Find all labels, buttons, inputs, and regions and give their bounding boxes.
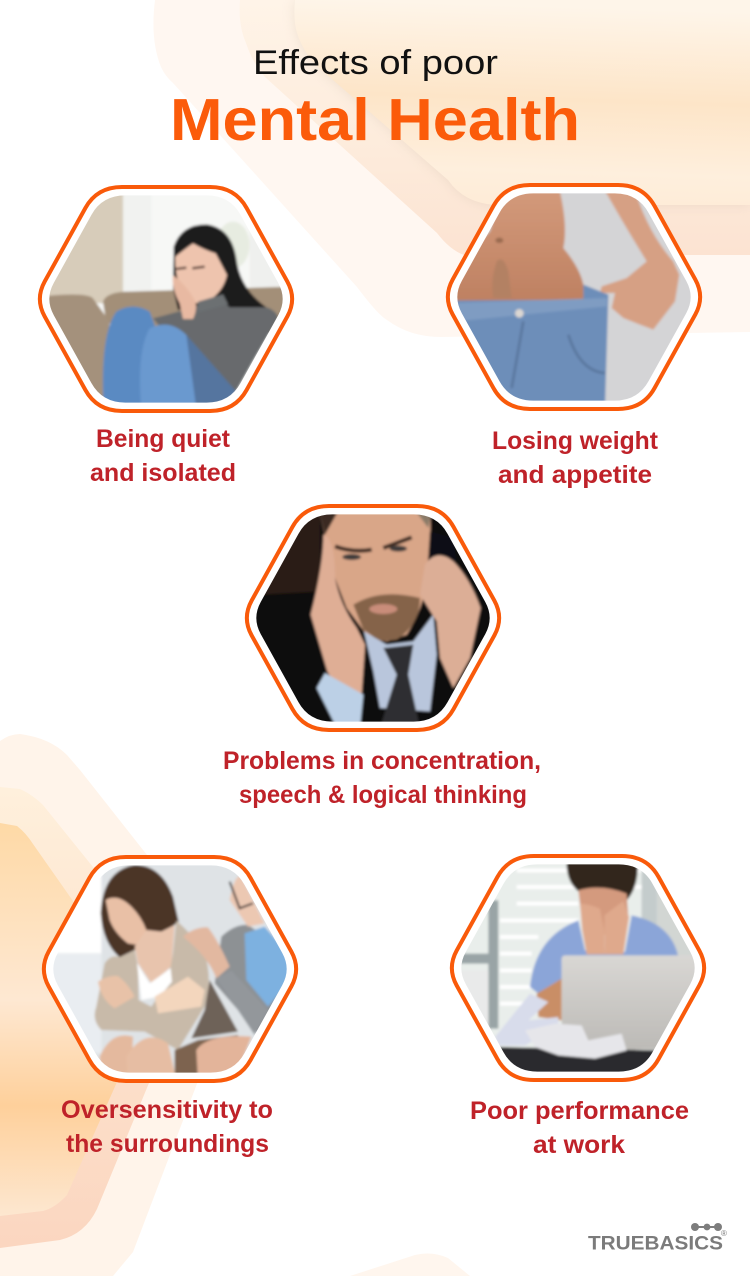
caption: speech & logical thinking bbox=[239, 781, 527, 809]
caption bbox=[90, 425, 236, 487]
logo icon: three linked dots bbox=[691, 1223, 722, 1231]
title bbox=[170, 44, 580, 153]
panel: poor performance at work bbox=[445, 850, 715, 1159]
caption: and isolated bbox=[90, 459, 236, 487]
title line 2: Mental Health bbox=[170, 87, 580, 153]
logo wordmark: TRUEBASICS bbox=[588, 1234, 723, 1254]
hexagon frame and photo: woman being comforted bbox=[35, 850, 305, 1090]
panel: losing weight and appetite bbox=[440, 175, 710, 489]
caption bbox=[223, 747, 541, 809]
caption: Being quiet bbox=[96, 425, 231, 453]
caption: Poor performance bbox=[470, 1097, 689, 1125]
caption bbox=[470, 1097, 689, 1159]
panel: problems in concentration bbox=[223, 498, 541, 809]
caption: at work bbox=[533, 1131, 625, 1159]
panel: being quiet and isolated bbox=[38, 185, 294, 481]
hexagon frame and photo: tired man at laptop bbox=[445, 850, 715, 1090]
background shapes: top right bbox=[153, 0, 750, 337]
caption: and appetite bbox=[498, 461, 652, 489]
logo: TrueBasics bbox=[588, 1223, 727, 1254]
logo registered mark: ® bbox=[721, 1229, 727, 1238]
background shapes: bottom left bbox=[0, 734, 470, 1276]
hexagon frame and photo: woman on sofa bbox=[38, 185, 294, 413]
hexagon frame and photo: stressed man on phone bbox=[240, 498, 510, 738]
caption: Problems in concentration, bbox=[223, 747, 541, 775]
hexagon frame and photo: loose jeans bbox=[440, 175, 710, 415]
caption bbox=[492, 427, 659, 489]
title line 1: Effects of poor bbox=[253, 44, 498, 82]
caption: the surroundings bbox=[66, 1130, 269, 1158]
caption: Oversensitivity to bbox=[61, 1096, 273, 1124]
panel: oversensitivity to the surroundings bbox=[35, 850, 305, 1158]
caption bbox=[61, 1096, 273, 1158]
caption: Losing weight bbox=[492, 427, 659, 455]
